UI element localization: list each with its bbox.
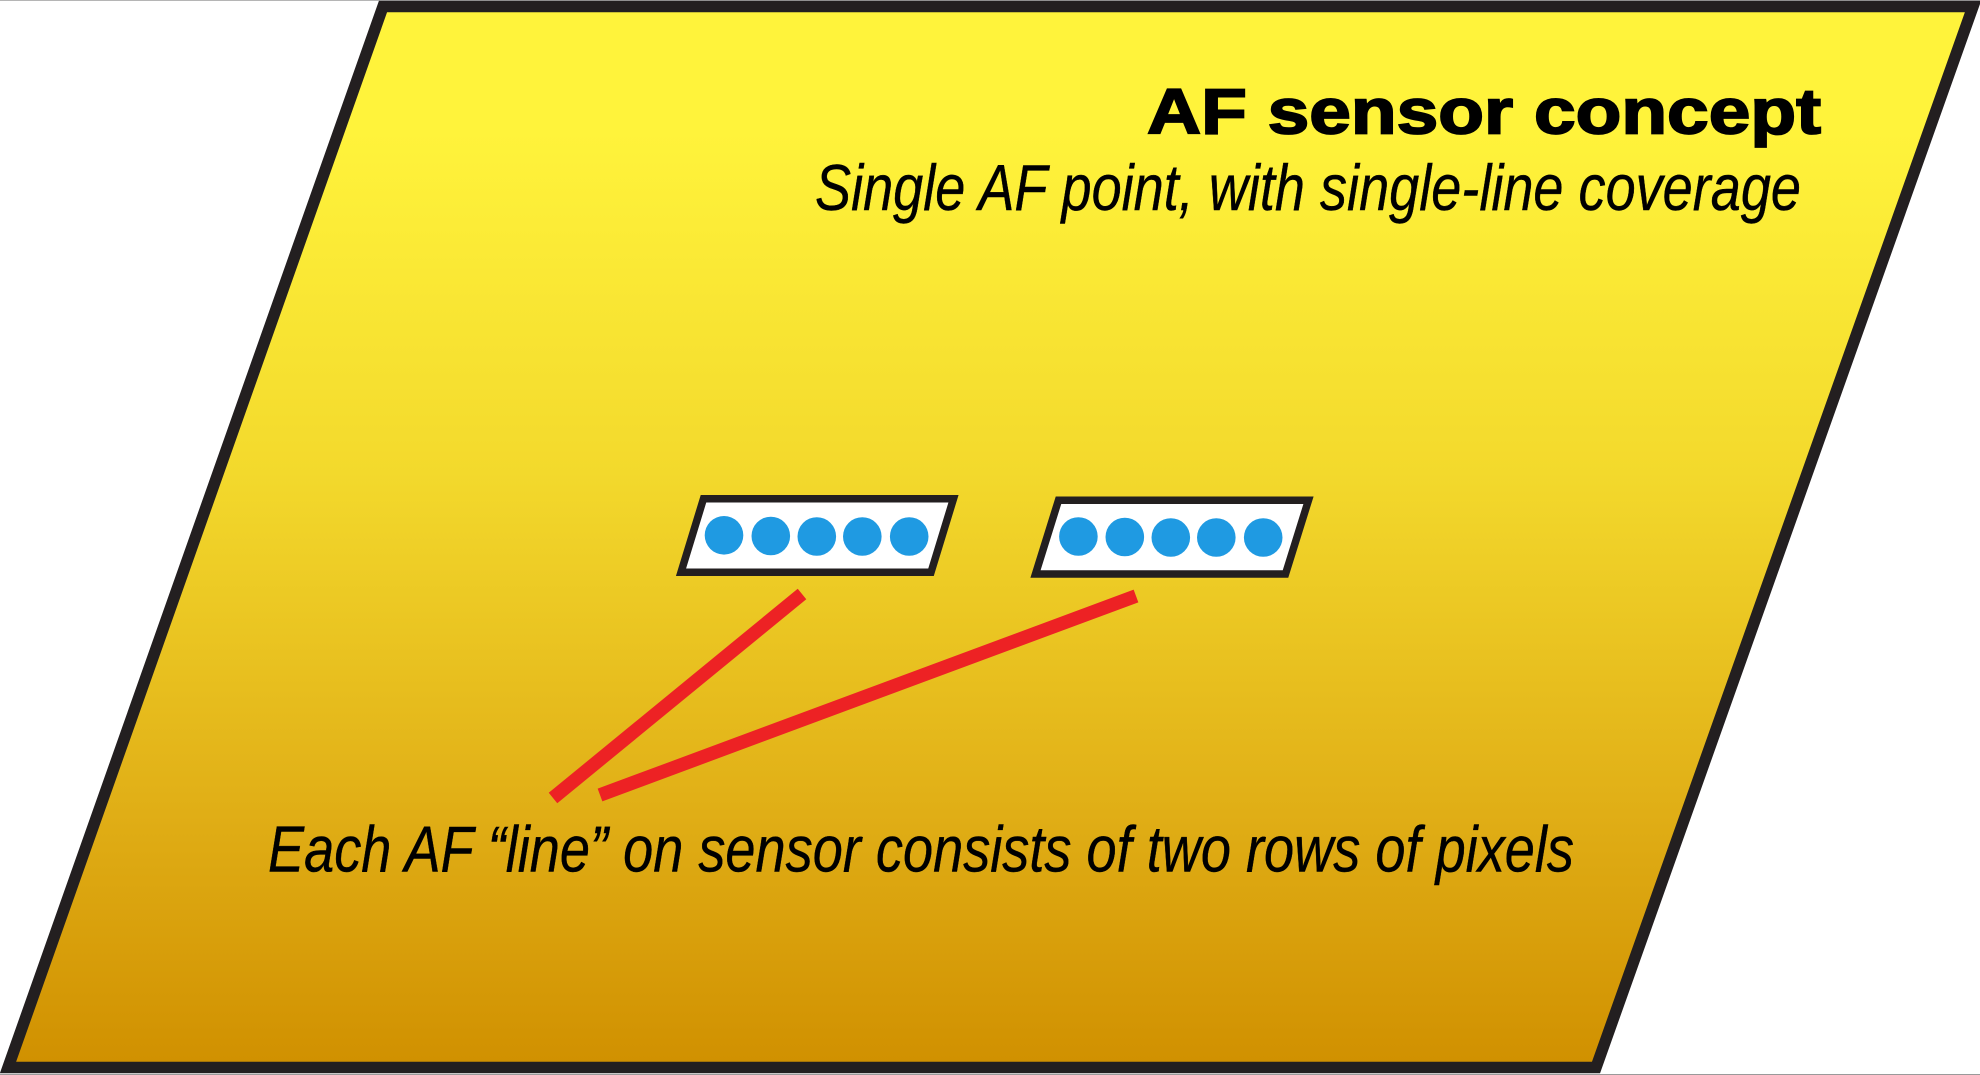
AF line 2: pixel row box [1036,500,1308,574]
red pointer line to AF line 1 [553,594,802,798]
pixels of AF line 2 [1059,517,1282,557]
pixels of AF line 1 [705,516,928,556]
AF line 1: pixel row box [681,499,954,572]
caption: Each AF “line” on sensor consists of two rows of pixels [268,812,1574,886]
title: AF sensor concept [1147,76,1821,148]
subtitle: Single AF point, with single-line coverage [815,151,1801,224]
red pointer line to AF line 2 [600,596,1136,795]
